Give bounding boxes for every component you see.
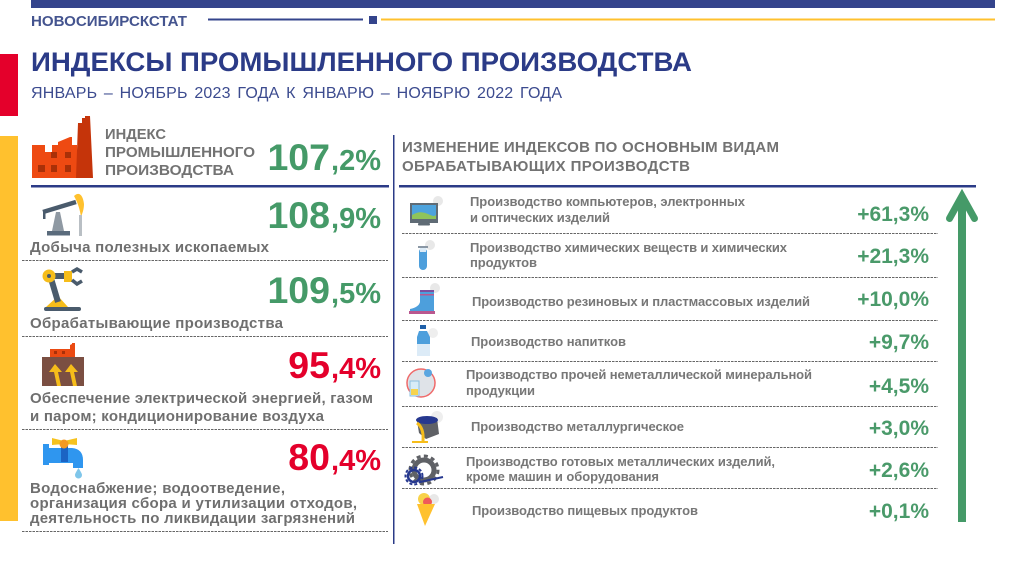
heading: industrial production index — [105, 127, 255, 179]
heading: changes by industry — [402, 139, 779, 175]
heading: industrial production index: ИНДЕКС — [105, 127, 167, 143]
row: food — [417, 493, 929, 526]
label: metal products — [466, 454, 775, 484]
vertical divider — [393, 135, 394, 544]
value: non-metallic: +4,5% — [869, 375, 929, 398]
icon: factory — [32, 116, 93, 178]
icon: power plant — [42, 343, 84, 386]
label: energy: Обеспечение электрической энергией, газом — [30, 390, 373, 407]
label: mining: Добыча полезных ископаемых — [30, 239, 270, 256]
label: metal products: кроме машин и оборудования — [466, 469, 659, 484]
label: chemicals: продуктов — [470, 255, 537, 270]
value: metallurgy: +3,0% — [869, 417, 929, 440]
row: metallurgy — [412, 411, 929, 443]
label: energy: и паром; кондиционирование воздуха — [30, 408, 325, 425]
value: food: +0,1% — [869, 500, 929, 523]
row: rubber — [409, 283, 929, 314]
header rule with square — [208, 16, 995, 24]
value: water: 80,4% — [288, 436, 381, 478]
label: metal products: Производство готовых металлических изделий, — [466, 454, 775, 469]
label: food: Производство пищевых продуктов — [472, 503, 698, 518]
row: chemicals — [418, 240, 929, 270]
icon: bottle — [417, 325, 438, 356]
row: beverages — [417, 325, 929, 356]
top bar — [31, 0, 995, 8]
row: energy — [30, 343, 381, 425]
icon: boot — [409, 283, 440, 314]
heading: industrial production index: ПРОИЗВОДСТВА — [105, 163, 235, 179]
subtitle: ЯНВАРЬ – НОЯБРЬ 2023 ГОДА К ЯНВАРЮ – НОЯБРЮ 2022 ГОДА — [31, 85, 562, 102]
label: non-metallic: продукции — [466, 383, 535, 398]
side accent: red — [0, 54, 18, 116]
icon: test tube — [418, 240, 435, 270]
label: beverages: Производство напитков — [471, 334, 626, 349]
icon: tap — [43, 438, 83, 479]
label: metallurgy: Производство металлургическое — [471, 419, 684, 434]
row: mining — [30, 194, 381, 256]
label: rubber: Производство резиновых и пластмассовых изделий — [472, 294, 810, 309]
label: energy — [30, 390, 373, 425]
header: organisation name: НОВОСИБИРСКСТАТ — [31, 14, 187, 30]
label: water: деятельность по ликвидации загрязнений — [30, 510, 355, 527]
label: water: Водоснабжение; водоотведение, — [30, 480, 285, 497]
icon: ladle — [412, 411, 443, 443]
heading: changes by industry: ИЗМЕНЕНИЕ ИНДЕКСОВ ПО ОСНОВНЫМ ВИДАМ — [402, 139, 779, 156]
heading: industrial production index: ПРОМЫШЛЕННОГО — [105, 145, 255, 161]
label: non-metallic: Производство прочей неметаллической минеральной — [466, 367, 812, 382]
value: total index: 107,2% — [267, 136, 381, 178]
label: computers: и оптических изделий — [470, 210, 610, 225]
panel: manufacturing changes — [399, 139, 976, 526]
panel: left indices — [22, 116, 389, 532]
label: manufacturing: Обрабатывающие производства — [30, 315, 284, 332]
label: chemicals — [470, 240, 788, 270]
value: beverages: +9,7% — [869, 331, 929, 354]
value: metal products: +2,6% — [869, 459, 929, 482]
arrow: growth — [950, 196, 974, 522]
row: computers — [410, 194, 929, 226]
title: ИНДЕКСЫ ПРОМЫШЛЕННОГО ПРОИЗВОДСТВА — [31, 47, 692, 77]
row: manufacturing — [30, 269, 381, 332]
icon: mirror and glass — [407, 369, 435, 397]
heading: changes by industry: ОБРАБАТЫВАЮЩИХ ПРОИЗВОДСТВ — [402, 158, 690, 175]
label: water: организация сбора и утилизации отходов, — [30, 495, 357, 512]
row: non-metallic — [407, 367, 929, 398]
label: water — [30, 480, 357, 527]
row: metal products — [406, 454, 929, 484]
icon: robot arm — [42, 269, 82, 311]
value: chemicals: +21,3% — [857, 245, 929, 268]
icon: gears and wrench — [406, 456, 443, 484]
row: water — [30, 436, 381, 527]
icon: monitor — [410, 196, 443, 226]
value: computers: +61,3% — [857, 203, 929, 226]
value: rubber: +10,0% — [857, 288, 929, 311]
label: computers — [470, 194, 746, 225]
value: mining: 108,9% — [267, 194, 381, 236]
icon: ice cream — [417, 493, 439, 526]
label: chemicals: Производство химических веществ и химических — [470, 240, 788, 255]
label: non-metallic — [466, 367, 812, 398]
label: computers: Производство компьютеров, электронных — [470, 194, 746, 209]
side accent: yellow — [0, 136, 18, 521]
icon: oil pump — [43, 194, 84, 236]
value: energy: 95,4% — [288, 344, 381, 386]
value: manufacturing: 109,5% — [267, 269, 381, 311]
